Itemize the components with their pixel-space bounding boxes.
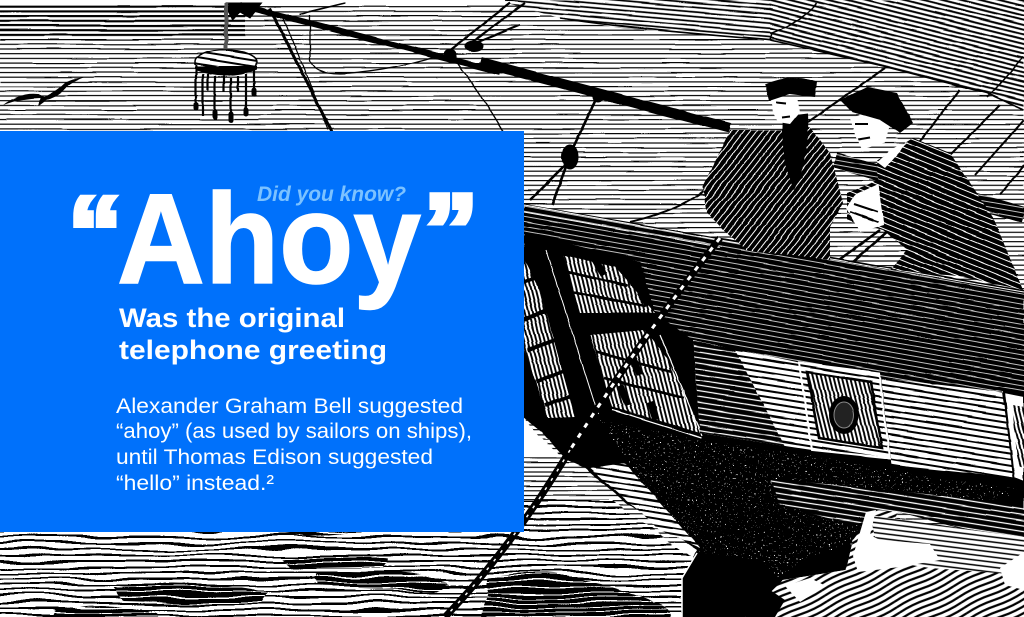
icon: seagull — [3, 77, 85, 106]
stern windows — [523, 250, 702, 455]
hull upper planking — [524, 204, 1024, 398]
heading: Ahoy: Ahoy — [117, 168, 421, 311]
subheading: telephone greeting — [119, 335, 387, 365]
rope — [445, 238, 720, 617]
label: did you know: Did you know? — [257, 183, 406, 206]
ship hull — [523, 204, 1024, 617]
body text: until Thomas Edison suggested — [116, 446, 433, 469]
body text: “hello” instead.² — [116, 472, 274, 495]
hull rail lines — [524, 205, 1024, 292]
opening quotation mark: “ — [68, 176, 122, 288]
hull light plank with shadow — [693, 340, 1015, 478]
subheading: Was the original — [119, 303, 345, 333]
closing quotation mark: ” — [424, 174, 478, 286]
sail, upper right — [505, 0, 1024, 110]
body text: Alexander Graham Bell suggested — [116, 395, 463, 418]
rigging lines — [270, 3, 1024, 262]
icon: hanging spreader — [195, 3, 257, 120]
porthole frame — [799, 363, 890, 458]
ship boom — [225, 3, 1024, 215]
body text: “ahoy” (as used by sailors on ships), — [116, 420, 472, 443]
panel: blue callout — [0, 131, 524, 532]
breaking wave foam — [745, 510, 1024, 617]
second porthole frame — [1004, 392, 1024, 482]
keel post — [682, 552, 790, 617]
sailor left — [703, 77, 843, 260]
lower hull planking — [770, 478, 1024, 543]
sailor right — [840, 87, 1023, 290]
stern shadow lines — [590, 463, 700, 548]
sea waves — [0, 455, 697, 617]
hull speckle — [600, 420, 1024, 610]
